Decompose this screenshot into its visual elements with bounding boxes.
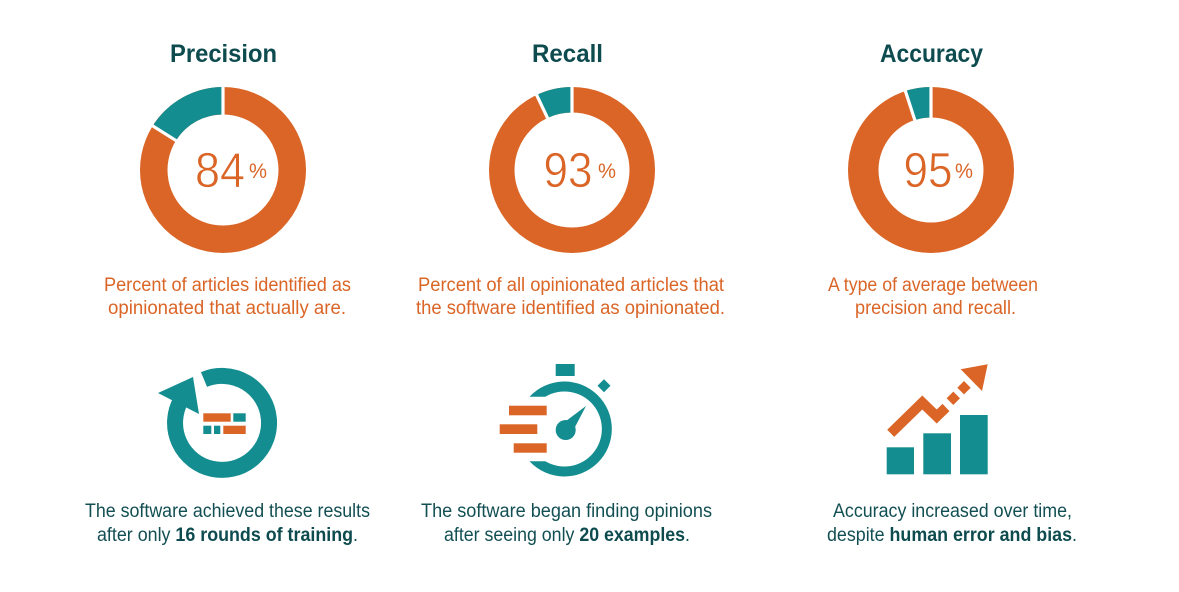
description: accuracy: A type of average between — [828, 275, 1038, 296]
description: accuracy: precision and recall. — [855, 298, 1016, 319]
description: recall: the software identified as opinionated. — [416, 298, 725, 319]
text: accuracy over time: despite human error and bias. — [827, 525, 1077, 546]
text: examples — [421, 501, 712, 546]
heading: accuracy: Accuracy — [880, 40, 983, 68]
heading: precision: Precision — [170, 40, 277, 68]
description: precision — [104, 275, 351, 319]
donut chart: accuracy 95% — [863, 85, 999, 238]
panel: examples — [421, 364, 712, 546]
panel: accuracy — [828, 40, 1038, 319]
description: precision: opinionated that actually are. — [108, 298, 346, 319]
value: 93%: 93 — [544, 144, 592, 198]
description: recall — [416, 275, 725, 319]
value: 84%: 84 — [195, 144, 245, 198]
donut chart: precision 84% — [150, 85, 292, 239]
panel: accuracy over time — [827, 364, 1077, 546]
panel: recall — [416, 40, 725, 319]
description: recall: Percent of all opinionated articles that — [418, 275, 725, 296]
panel: precision — [104, 40, 351, 319]
icon: rising bar chart with arrow — [887, 364, 988, 474]
text: accuracy over time: Accuracy increased over time, — [833, 501, 1072, 522]
text: training rounds: after only 16 rounds of training. — [97, 525, 358, 546]
value: 93%: % — [598, 160, 616, 183]
text: examples: The software began finding opinions — [421, 501, 712, 522]
value: 95%: 95 — [904, 144, 952, 198]
icon: stopwatch with speed lines — [500, 364, 612, 477]
icon: circular arrow with bricks — [158, 376, 269, 470]
heading: recall: Recall — [532, 40, 603, 68]
text: accuracy over time — [827, 501, 1077, 546]
value: 84%: % — [249, 160, 267, 183]
text: examples: after seeing only 20 examples. — [444, 525, 690, 546]
description: precision: Percent of articles identified as — [104, 275, 351, 296]
value: 95%: % — [955, 160, 973, 183]
donut chart: recall 93% — [502, 85, 642, 240]
description: accuracy — [828, 275, 1038, 319]
text: training rounds — [85, 501, 370, 546]
text: training rounds: The software achieved these results — [85, 501, 370, 522]
panel: training rounds — [85, 376, 370, 546]
